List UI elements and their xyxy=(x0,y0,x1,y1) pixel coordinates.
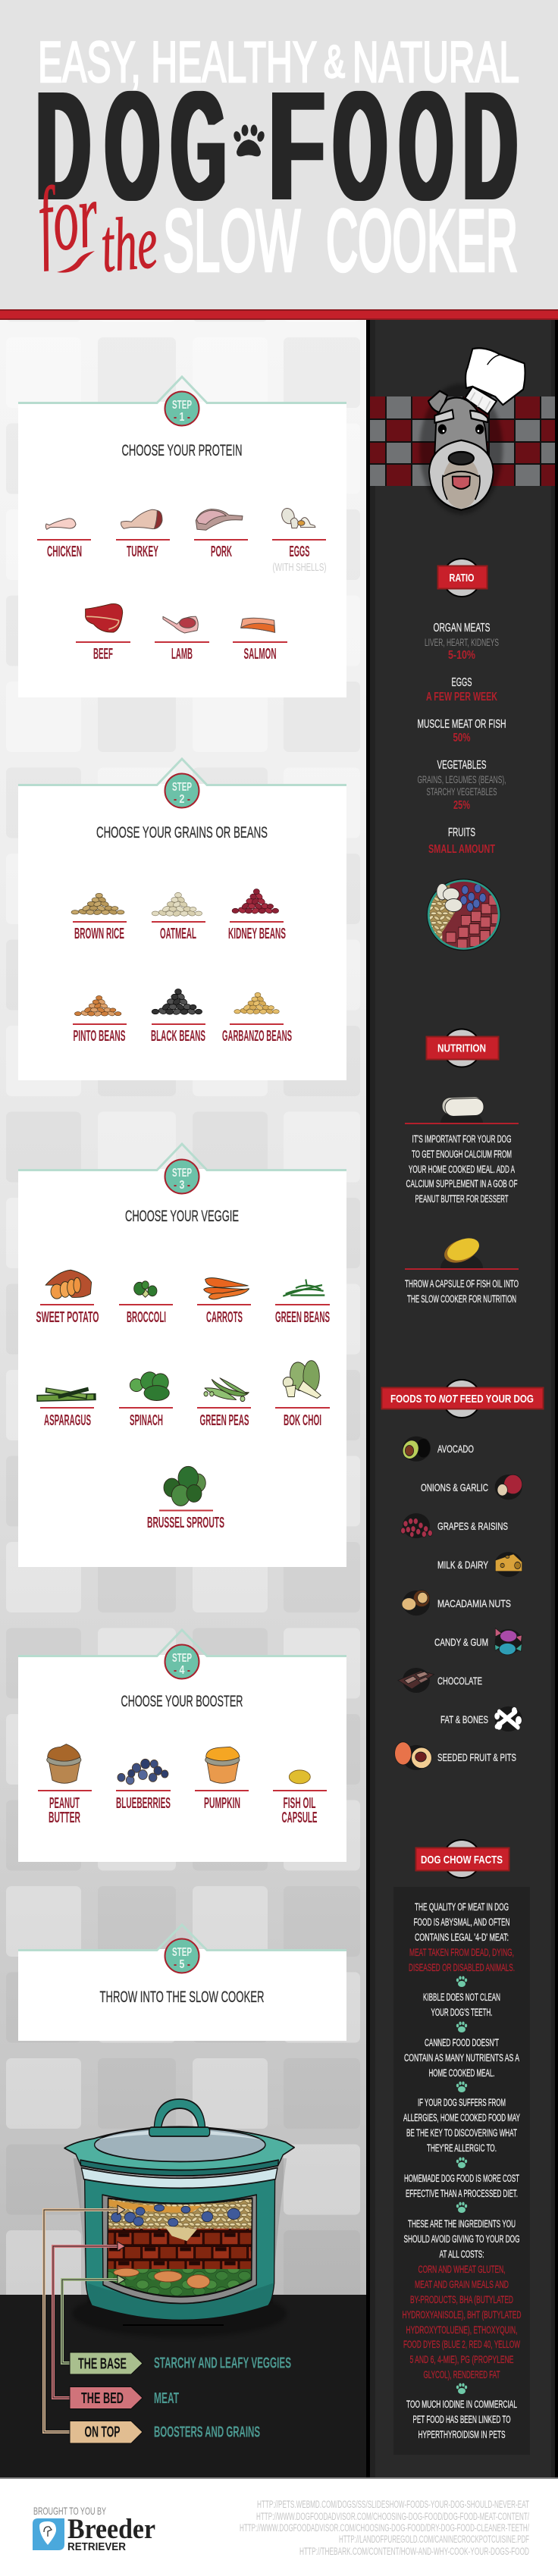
title line: dog food: G xyxy=(171,59,226,233)
ratio list: EGGS xyxy=(452,676,472,689)
title line: dog food: D xyxy=(36,59,90,233)
layer leader lines xyxy=(44,2210,121,2432)
ratio list: ORGAN MEATS xyxy=(434,622,490,635)
divider and nutrition text: fish oil xyxy=(405,1268,519,1305)
logo: breeder retriever xyxy=(33,2514,155,2553)
arrows xyxy=(118,2205,125,2284)
step badge xyxy=(18,1144,346,1193)
list of foods to avoid: CHOCOLATE xyxy=(437,1675,482,1687)
panel: step 1 protein xyxy=(18,377,346,697)
counter top xyxy=(0,2295,367,2479)
legend: the bed: THE BED xyxy=(81,2390,124,2407)
list of foods to avoid: FAT & BONES xyxy=(440,1713,488,1725)
list of foods to avoid: SEEDED FRUIT & PITS xyxy=(437,1751,516,1763)
booster labels: PEANUT xyxy=(49,1795,80,1812)
step badge: - 2 - xyxy=(174,793,190,806)
title line: slow cooker: SLOW xyxy=(163,193,300,290)
protein labels: LAMB xyxy=(171,646,193,663)
ratio list: STARCHY VEGETABLES xyxy=(426,786,497,798)
veggie labels: GREEN PEAS xyxy=(200,1412,249,1429)
banner: dog chow facts: DOG CHOW FACTS xyxy=(421,1854,503,1866)
legend: on top: BOOSTERS AND GRAINS xyxy=(154,2424,260,2441)
red divider bar xyxy=(0,309,558,320)
footer credit xyxy=(33,2505,155,2553)
grain labels: BROWN RICE xyxy=(74,926,124,942)
list of foods to avoid: MACADAMIA NUTS xyxy=(437,1597,511,1609)
heading: THROW INTO THE SLOW COOKER xyxy=(100,1988,264,2006)
panel: step 5 slow cooker xyxy=(18,1925,346,2041)
shadow under cooker xyxy=(123,2324,224,2326)
legend: the base: STARCHY AND LEAFY VEGGIES xyxy=(154,2355,291,2371)
step badge: STEP xyxy=(172,1167,192,1180)
title line: easy, healthy and natural: EASY, HEALTHY xyxy=(38,30,317,95)
sources xyxy=(240,2499,529,2557)
icon: fish oil capsule xyxy=(440,1234,483,1268)
header background xyxy=(0,0,558,311)
legend: on top xyxy=(70,2421,260,2443)
list of foods to avoid xyxy=(421,1443,516,1763)
banner: ratio xyxy=(438,559,487,597)
step badge: - 3 - xyxy=(174,1179,190,1192)
step badge: STEP xyxy=(172,1652,192,1665)
ratio list: SMALL AMOUNT xyxy=(428,843,495,856)
ratio list: LIVER, HEART, KIDNEYS xyxy=(425,637,499,648)
logo: breeder retriever: RETRIEVER xyxy=(67,2541,126,2553)
step badge xyxy=(18,1925,346,1973)
veggie labels: SWEET POTATO xyxy=(36,1309,99,1326)
booster labels: FISH OIL xyxy=(284,1795,315,1812)
protein labels: PORK xyxy=(211,544,232,560)
title xyxy=(33,30,519,290)
step badge xyxy=(18,1630,346,1678)
list of foods to avoid: ONIONS & GARLIC xyxy=(421,1481,488,1493)
veggie labels: SPINACH xyxy=(130,1412,163,1429)
protein labels: SALMON xyxy=(244,646,276,663)
grain labels: KIDNEY BEANS xyxy=(228,926,286,942)
divider and nutrition text: calcium xyxy=(405,1123,519,1205)
banner: dog chow facts xyxy=(415,1840,509,1878)
panel: dog chow facts: KIBBLE DOES NOT CLEAN xyxy=(423,1992,500,2003)
panel: step 3 veggie: GREEN BEANS xyxy=(275,1309,330,1326)
booster labels: BLUEBERRIES xyxy=(116,1795,171,1812)
illustration: slow cooker xyxy=(64,2099,294,2337)
sidebar banner checker cloth xyxy=(370,396,555,486)
title line: dog food: O xyxy=(105,59,159,233)
step badge xyxy=(18,759,346,808)
ratio list: VEGETABLES xyxy=(437,759,487,772)
heading: CHOOSE YOUR GRAINS OR BEANS xyxy=(96,824,268,841)
ratio list: FRUITS xyxy=(448,826,475,839)
title line: easy, healthy and natural: & xyxy=(324,36,345,87)
step badge: - 1 - xyxy=(174,411,190,424)
panel: dog chow facts: AT ALL COSTS: xyxy=(440,2249,484,2260)
panel: step 3 veggie xyxy=(18,1144,346,1567)
booster labels: PUMPKIN xyxy=(204,1795,240,1812)
step badge: - 5 - xyxy=(174,1958,190,1971)
heading: CHOOSE YOUR BOOSTER xyxy=(121,1693,243,1710)
footer credit: BROUGHT TO YOU BY xyxy=(33,2505,106,2517)
veggie labels: ASPARAGUS xyxy=(44,1412,91,1429)
ratio list: MUSCLE MEAT OR FISH xyxy=(417,718,506,731)
ratio list: 25% xyxy=(453,799,470,812)
title line: dog food: O xyxy=(334,59,387,233)
ratio list: 50% xyxy=(453,732,470,744)
icons: foods to avoid xyxy=(395,1437,522,1770)
booster labels: BUTTER xyxy=(49,1810,80,1826)
veggie labels xyxy=(36,1305,330,1531)
icons: boosters xyxy=(47,1744,310,1785)
panel: dog chow facts: CORN AND WHEAT GLUTEN, xyxy=(418,2264,505,2275)
legend: the bed xyxy=(70,2386,179,2409)
banner: nutrition xyxy=(426,1029,499,1067)
veggie labels: BOK CHOI xyxy=(284,1412,321,1429)
panel: step 2 grains or beans: GARBANZO BEANS xyxy=(222,1028,292,1045)
panel: dog chow facts: HYPERTHYROIDISM IN PETS xyxy=(418,2429,505,2440)
ratio list: 5-10% xyxy=(448,649,475,662)
veggie labels: BRUSSEL SPROUTS xyxy=(147,1515,224,1531)
title line: dog food: O xyxy=(400,59,453,233)
list of foods to avoid: GRAPES & RAISINS xyxy=(437,1520,508,1532)
panel: dog chow facts: HOME COOKED MEAL. xyxy=(429,2067,494,2079)
grain labels: PINTO BEANS xyxy=(73,1028,126,1045)
legend: the bed: MEAT xyxy=(154,2390,179,2407)
list of foods to avoid: AVOCADO xyxy=(437,1443,474,1455)
step badge xyxy=(18,377,346,426)
icon: calcium pill xyxy=(440,1096,484,1123)
booster labels xyxy=(38,1791,327,1826)
booster labels: CAPSULE xyxy=(282,1810,317,1826)
heading: CHOOSE YOUR VEGGIE xyxy=(125,1208,239,1225)
panel: dog chow facts: CONTAINS LEGAL '4-D' MEAT: xyxy=(415,1932,509,1943)
protein labels: CHICKEN xyxy=(47,544,82,560)
protein labels: (WITH SHELLS) xyxy=(273,561,326,574)
step badge: STEP xyxy=(172,1946,192,1959)
icon: paw print xyxy=(233,124,265,156)
grain labels xyxy=(73,922,292,1045)
legend: the base: THE BASE xyxy=(78,2356,127,2373)
heading: CHOOSE YOUR PROTEIN xyxy=(121,442,243,459)
legend: the base xyxy=(70,2352,291,2374)
panel: step 4 booster xyxy=(18,1630,346,1862)
title line: dog food xyxy=(36,59,517,233)
protein labels: EGGS xyxy=(290,544,309,560)
step badge: STEP xyxy=(172,399,192,412)
protein labels: BEEF xyxy=(93,646,113,663)
veggie labels: CARROTS xyxy=(206,1309,243,1326)
legend: on top: ON TOP xyxy=(85,2424,120,2441)
banner: nutrition: NUTRITION xyxy=(437,1042,486,1055)
left column tiled wall xyxy=(0,320,367,2296)
ratio list: GRAINS, LEGUMES (BEANS), xyxy=(417,774,506,785)
panel: dog chow facts: THEY'RE ALLERGIC TO. xyxy=(427,2142,497,2154)
banner: ratio: RATIO xyxy=(449,572,475,584)
title script: for the: for xyxy=(33,164,103,272)
list of foods to avoid: MILK & DAIRY xyxy=(437,1559,488,1571)
panel: dog chow facts: CANNED FOOD DOESN'T xyxy=(425,2037,499,2048)
protein labels xyxy=(37,540,326,663)
list of foods to avoid: CANDY & GUM xyxy=(434,1636,488,1648)
panel: step 2 grains or beans xyxy=(18,759,346,1080)
title line: dog food: F xyxy=(269,59,324,233)
icons: proteins xyxy=(45,506,315,633)
banner: foods to not feed your dog: FOODS TO NOT FEED YOUR DOG xyxy=(390,1393,534,1406)
panel: dog chow facts: GLYCOL), RENDERED FAT xyxy=(423,2369,500,2380)
step badge: STEP xyxy=(172,781,192,794)
step badge: - 4 - xyxy=(174,1664,190,1677)
icon: food plate xyxy=(425,878,501,953)
ratio list xyxy=(417,622,506,856)
grain labels: OATMEAL xyxy=(160,926,196,942)
logo: breeder retriever: Breeder xyxy=(67,2514,155,2545)
veggie labels: BROCCOLI xyxy=(127,1309,166,1326)
icons: grain piles xyxy=(71,889,279,1017)
banner: foods to not feed your dog xyxy=(382,1380,543,1418)
icons: veggies xyxy=(36,1270,324,1506)
panel: dog chow facts xyxy=(393,1887,530,2455)
protein labels: TURKEY xyxy=(127,544,158,560)
title script: for the: the xyxy=(98,199,161,288)
illustration: dog chef xyxy=(419,348,525,514)
grain labels: BLACK BEANS xyxy=(151,1028,205,1045)
ratio list: A FEW PER WEEK xyxy=(426,691,497,704)
panel: dog chow facts: YOUR DOG'S TEETH. xyxy=(431,2007,493,2018)
footer background xyxy=(0,2478,558,2576)
